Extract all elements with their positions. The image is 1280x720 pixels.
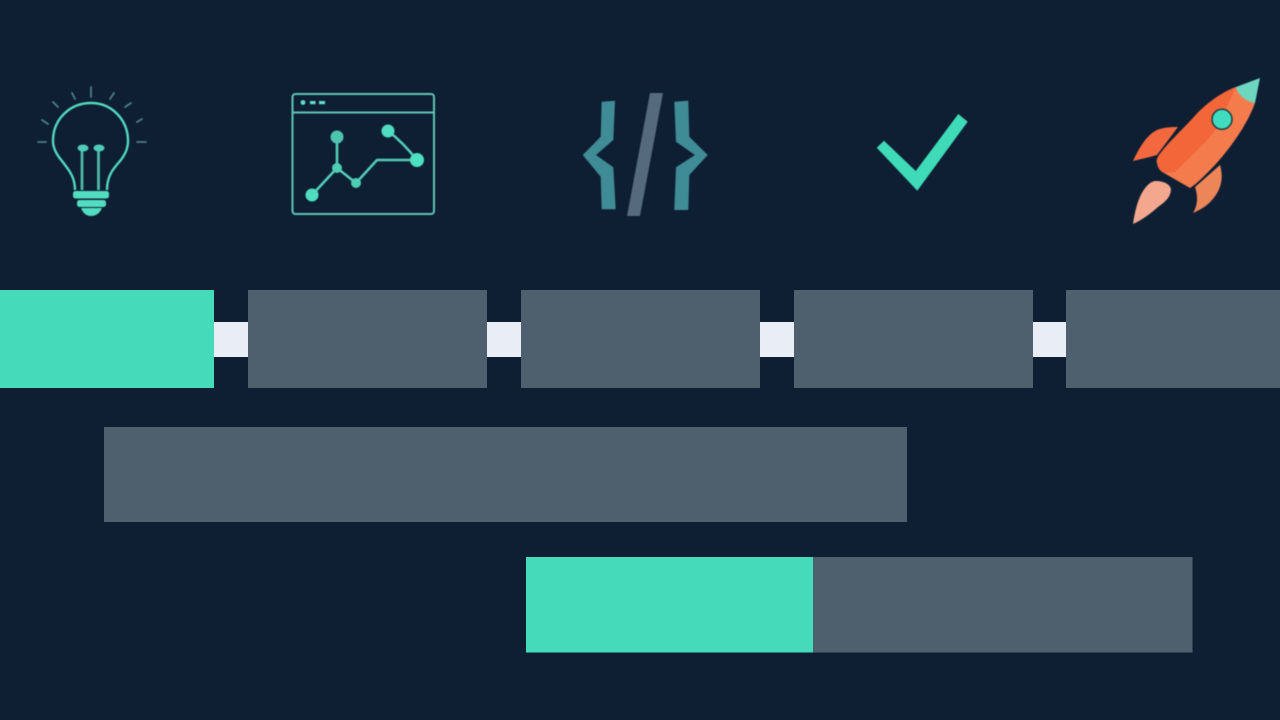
timeline row: phase 4 <box>794 290 1033 388</box>
rocket shaded side <box>1157 87 1236 173</box>
timeline row: phase 2 <box>248 290 487 388</box>
timeline row: phase 3 <box>521 290 760 388</box>
icon: light bulb <box>38 87 146 216</box>
icon: rocket <box>1133 78 1260 224</box>
connector <box>1033 322 1066 357</box>
connector <box>214 322 248 357</box>
progress bar: fill <box>526 557 813 652</box>
long gray bar <box>104 427 907 522</box>
rocket body <box>1157 87 1255 188</box>
connector <box>760 322 794 357</box>
icon: code brackets <box>583 93 708 216</box>
rocket right fin <box>1193 165 1222 213</box>
rocket flame <box>1133 181 1171 224</box>
rocket nose cone <box>1236 78 1260 103</box>
progress bar <box>526 557 1192 652</box>
rocket window <box>1212 109 1232 129</box>
progress bar: track <box>813 557 1192 652</box>
connector <box>487 322 521 357</box>
icon: check mark <box>877 114 968 191</box>
timeline row: green phase <box>0 290 214 388</box>
timeline row: phase 5 <box>1066 290 1280 388</box>
icon: browser window with chart <box>292 94 434 214</box>
rocket left fin <box>1133 127 1178 161</box>
